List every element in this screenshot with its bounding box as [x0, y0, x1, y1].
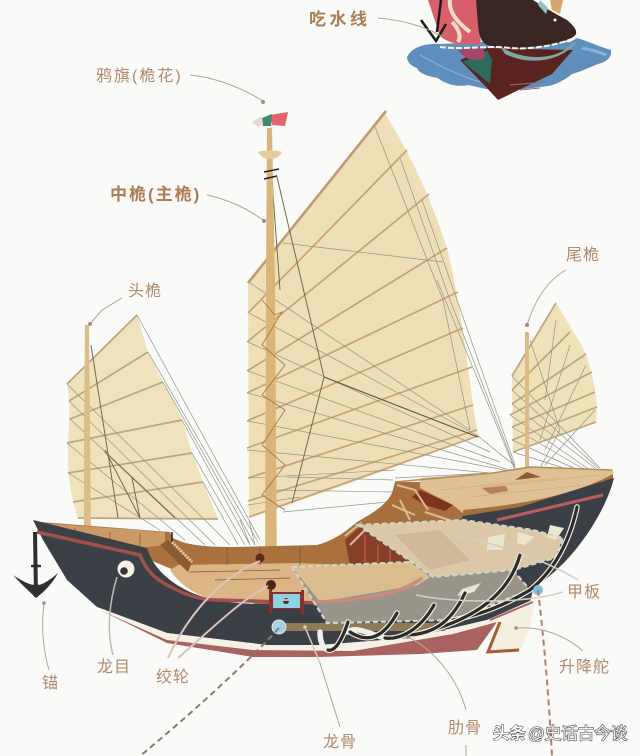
label: 肋骨: 肋骨: [448, 719, 482, 737]
red keel band: [100, 610, 497, 657]
label: 鸦旗: [96, 67, 265, 104]
flag: [252, 112, 288, 127]
fore sail: [67, 315, 218, 519]
label: 吃水线: 吃水线: [309, 10, 370, 29]
cutaway overlay: [292, 520, 564, 623]
label: 吃水线: [309, 10, 441, 36]
midship interior wood: [38, 482, 440, 620]
main mast: [258, 128, 285, 585]
label: 绞轮: [156, 561, 268, 686]
winch drums: [256, 554, 276, 590]
label: 锚: [42, 601, 59, 692]
ribs: [320, 507, 577, 650]
label: 头桅: 头桅: [128, 282, 162, 300]
label: 鸦旗: 鸦旗(桅花): [96, 67, 183, 85]
anchor: [13, 532, 58, 598]
upper deck cutaway: [358, 520, 563, 577]
blue markers: [272, 585, 543, 634]
watermark: @史话古今谈: [528, 724, 628, 743]
fore mast: [84, 325, 91, 537]
watermark: 头条: [493, 723, 526, 743]
winch plate: [269, 590, 304, 614]
label: 龙骨: [303, 625, 357, 751]
dragon eye: [118, 560, 134, 578]
label: 锚: 锚: [42, 674, 59, 692]
label: 甲板: 甲板: [567, 583, 601, 601]
label: 龙目: 龙目: [97, 658, 131, 676]
lower deck cutaway: [292, 562, 530, 623]
keel: [285, 623, 445, 631]
rigging: [67, 127, 600, 545]
label: 甲板: [416, 537, 601, 601]
label: 中桅: 中桅(主桅): [110, 184, 201, 204]
watermark: [493, 723, 628, 743]
dashed outlines: [292, 520, 563, 623]
inset: waterline ship stern: [407, 0, 611, 100]
label: 升降舵: [514, 626, 610, 676]
label: 升降舵: 升降舵: [559, 658, 610, 676]
label: 绞轮: 绞轮: [156, 668, 190, 686]
masts: [84, 128, 529, 585]
stern interior: [358, 482, 463, 525]
label: 龙骨: 龙骨: [323, 733, 357, 751]
label: 中桅: [110, 184, 266, 223]
label: 尾桅: 尾桅: [566, 246, 600, 264]
hull: [33, 478, 614, 657]
label: 龙目: [97, 577, 131, 676]
stern sail: [510, 303, 597, 452]
white band: [97, 600, 534, 651]
label: 尾桅: [525, 246, 600, 327]
label: 头桅: [88, 282, 162, 326]
dashed section lines: [140, 590, 552, 756]
main sail: [247, 111, 478, 518]
rudder: [488, 604, 534, 653]
stern deck: [395, 467, 613, 516]
stern mast: [525, 332, 529, 475]
hull red stripe: [37, 532, 427, 603]
label: 肋骨: [406, 635, 482, 756]
